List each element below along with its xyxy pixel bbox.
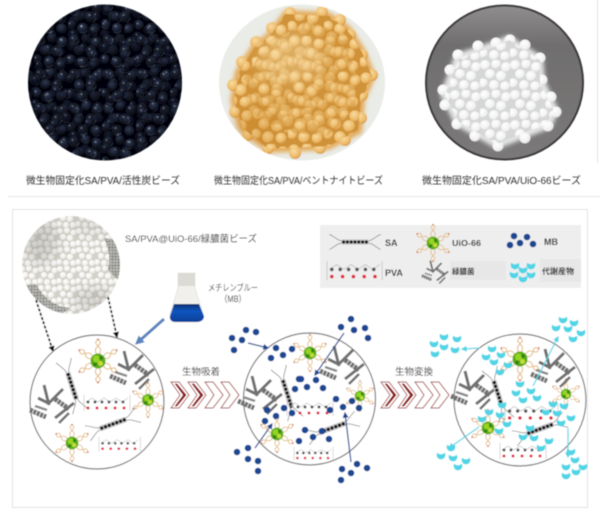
label: methylene blue: メチレンブルー: [208, 282, 258, 293]
photo: bentonite beads: [217, 3, 387, 163]
legend item: UiO-66: UiO-66: [452, 238, 481, 248]
arrows: metabolites out of circle 3: [449, 337, 568, 457]
arrows: MB into circle 2: [248, 333, 351, 462]
legend item: PVA: PVA: [385, 268, 403, 278]
arrow: beads to circle right: [108, 297, 117, 337]
legend item: PVA: [327, 261, 403, 280]
circle 1: initial beads: [30, 335, 165, 469]
label: biotransformation: 生物変換: [395, 366, 433, 378]
caption: UiO-66 beads: 微生物固定化SA/PVA/UiO-66ビーズ: [422, 174, 581, 187]
caption: bentonite beads: 微生物固定化SA/PVA/ベントナイトビーズ: [214, 174, 383, 187]
photo: activated carbon beads: [27, 4, 183, 162]
legend item: MB: MB: [544, 237, 558, 247]
label: methylene blue: （MB）: [220, 294, 246, 304]
label: methylene blue: [208, 282, 258, 304]
MB molecules: [229, 316, 371, 483]
metabolites: [430, 317, 587, 479]
label: biosorption: 生物吸着: [182, 366, 220, 378]
legend item: bacteria: 緑膿菌: [452, 266, 475, 276]
caption: activated carbon beads: 微生物固定化SA/PVA/活性炭ビーズ: [26, 174, 180, 187]
legend item: UiO-66: [415, 224, 481, 262]
arrow: biotransformation chevrons: [381, 382, 449, 408]
legend item: SA: SA: [385, 238, 398, 248]
label: bead name: SA/PVA@UiO-66/緑膿菌ビーズ: [125, 233, 257, 245]
photo: SA/PVA@UiO-66 beads: [20, 214, 122, 316]
icon: flask with methylene blue: [170, 273, 204, 322]
divider lines: [8, 0, 600, 196]
arrow: biosorption chevrons: [171, 382, 239, 408]
arrow: flask to circle: [137, 319, 164, 343]
legend item: MB: [507, 233, 558, 248]
legend item: bacteria: [422, 261, 475, 283]
arrow: beads to circle left: [36, 300, 53, 351]
legend item: metabolites: 代謝産物: [542, 266, 574, 276]
photo: UiO-66 beads in dish: [423, 3, 587, 163]
circle 3: biotransformation: [451, 334, 586, 466]
legend: [320, 224, 581, 288]
panel: process diagram: [12, 210, 588, 508]
legend item: metabolites: [510, 263, 574, 282]
circle 2: MB adsorption: [238, 333, 376, 465]
legend item: SA: [329, 234, 398, 250]
